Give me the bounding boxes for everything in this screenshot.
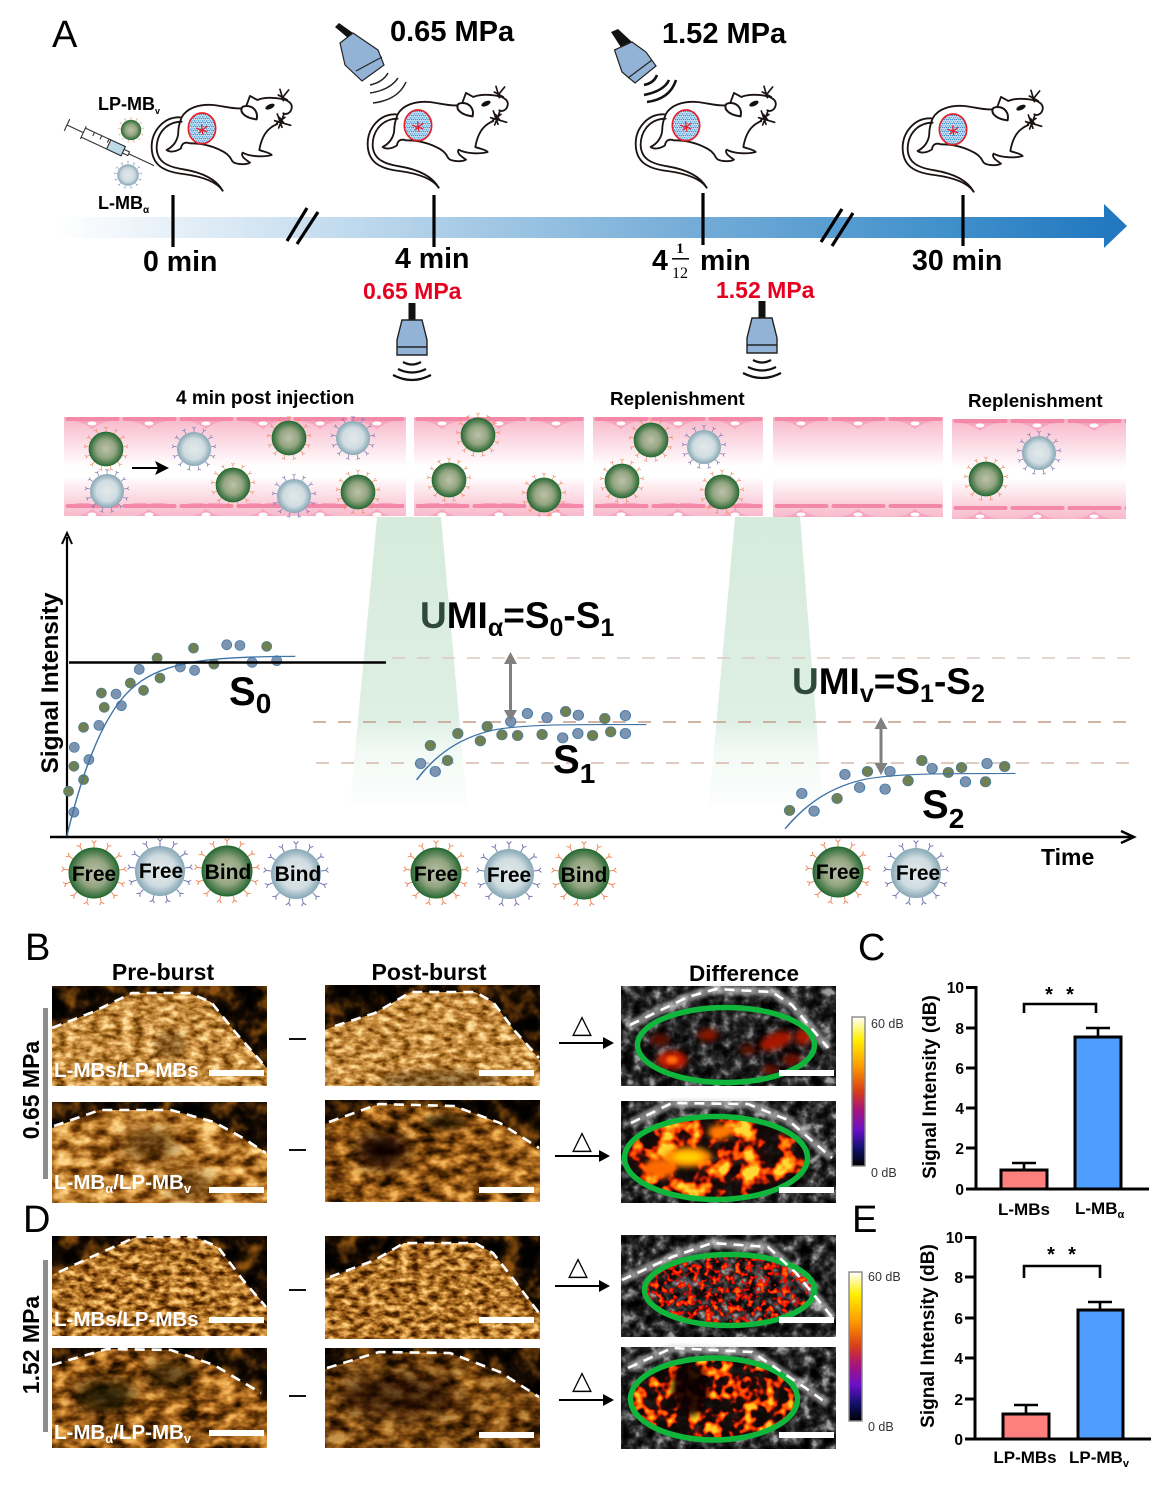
label: LP-MBv: LP-MB [98,94,155,114]
bar: 0.65 MPa group [43,1008,48,1179]
bar chart C: 10 [947,980,964,997]
label: 4 1/12 min: min [700,245,751,277]
label: 1.52 MPa group: 1.52 MPa [18,1296,44,1394]
S1 label: 1 [580,758,595,789]
ultrasound: pre-burst 1.52 MPa L-MBs: L-MBs/LP-MBs [54,1308,199,1331]
equation UMI alpha: =S [503,595,550,636]
bubble: free green 3: Free [816,861,860,884]
ultrasound: post-burst 1.52 MPa L-MBa [325,1348,540,1448]
bubble: bind green 2 [551,842,617,906]
bar chart C: 2 [955,1141,964,1158]
colour bar top: 60 dB [871,1017,904,1031]
bubble: bind green 2: Bind [561,864,607,887]
label: red 0.65 MPa: 0.65 MPa [363,278,462,304]
vessel 2 [414,413,584,517]
label: 0.65 MPa top: 0.65 MPa [390,16,515,48]
icon: L-MBa bubble [114,161,142,189]
S1 label: S [553,738,580,782]
colour bar bottom: 0 dB [868,1420,894,1434]
S2 label: S [922,783,949,827]
ultrasound: post-burst 1.52 MPa L-MBs [325,1236,540,1339]
rat at 4 min [368,86,508,188]
ultrasound: pre-burst 0.65 MPa L-MBa [52,1102,267,1203]
bar chart C: * [1045,984,1053,1006]
equation UMI v: =S [874,661,920,702]
difference image row 2 [621,1101,836,1203]
bubble: free grey 1 [127,838,193,903]
bubble: free grey 1: Free [139,860,183,883]
S2 label: 2 [949,803,964,834]
bubble: free grey 3 [883,840,949,905]
label: LP-MBv: v [155,106,160,116]
minus signs [289,1038,306,1397]
column heading: Difference: Difference [689,961,799,986]
timeline ticks and axis breaks [173,193,963,247]
bubble: free grey 3: Free [896,862,940,885]
equation UMI alpha: 1 [600,614,614,642]
difference image row 4 [621,1347,836,1449]
label: 4 1/12 min: 12 [672,265,688,282]
difference image row 3 [621,1235,836,1337]
delta and arrow row 3: △ [568,1252,588,1282]
bubble: bind green 1: Bind [205,861,251,884]
bar chart C: L-MBs [998,1200,1050,1219]
equation UMI alpha: 0 [550,614,563,642]
vessel 5 [952,419,1126,519]
bubble: free green 2 [403,840,469,905]
ultrasound: pre-burst 0.65 MPa L-MBs: L-MBs/LP-MBs [54,1059,199,1082]
ultrasound: pre-burst 1.52 MPa L-MBa: α [105,1431,113,1446]
icon: tilted probe 0.65 MPa [335,23,406,103]
bar chart C: 8 [955,1021,964,1038]
ultrasound: post-burst 0.65 MPa L-MBa [325,1100,540,1202]
colour bar top [852,1017,904,1180]
bar chart E: LP-MB [1069,1448,1123,1467]
bar chart E: 2 [954,1392,963,1409]
bubble: free green 3 [805,840,871,904]
label: 4 min: 4 min [395,243,469,275]
equation UMI v: v [860,680,874,708]
delta and arrow row 4 [559,1366,614,1406]
bar chart E: 10 [946,1230,963,1247]
y axis title: Signal Intensity [37,592,64,774]
bubble: bind green 1 [194,838,260,903]
icon: syringe [64,119,157,172]
ultrasound: pre-burst 0.65 MPa L-MBa: v [184,1181,192,1196]
column heading: Pre-burst: Pre-burst [112,959,214,985]
ultrasound: pre-burst 0.65 MPa L-MBs [52,986,267,1086]
S0 level line [69,661,386,664]
bubble: free grey 2 [476,842,542,906]
panel D label: D [23,1199,50,1241]
S0 label: 0 [256,688,271,719]
bar chart E: * [1068,1244,1076,1266]
equation UMI v: 2 [971,680,985,708]
label: L-MBa: L-MB [98,193,143,213]
icon: probe 1.52 MPa [743,301,781,378]
label: 30 min: 30 min [912,245,1002,277]
x axis title: Time [1041,844,1094,870]
label: 4 1/12 min [652,241,751,282]
label: 0.65 MPa group: 0.65 MPa [18,1041,44,1139]
S0 scatter and curve [64,640,295,836]
equation UMI alpha: α [488,614,504,642]
bubble: free green 1: Free [72,863,116,886]
chart axes [50,533,1134,843]
label: Replenishment 2: Replenishment [968,390,1103,411]
double arrow UMI v [874,717,888,775]
icon: LP-MBv bubble [118,117,144,143]
bar chart C: 4 [955,1101,964,1118]
rat at 0 min [152,89,292,191]
bar chart E: * [1047,1244,1055,1266]
equation UMI v: UMI [792,661,860,702]
panel B label: B [25,927,50,969]
panel E label: E [852,1199,877,1241]
difference image row 1 [621,986,836,1086]
bar chart C: L-MB [1075,1199,1117,1218]
ultrasound: pre-burst 1.52 MPa L-MBa [52,1348,267,1448]
equation UMI alpha: UMI [420,595,488,636]
bar chart E: 6 [954,1311,963,1328]
S0 label: S [229,670,256,714]
equation UMI alpha: -S [563,595,600,636]
ultrasound: pre-burst 1.52 MPa L-MBa: /LP-MB [113,1421,184,1444]
bubble: free green 1 [61,840,127,905]
label: Replenishment 1: Replenishment [610,388,745,409]
vessel 1 [64,416,406,518]
delta and arrow row 3 [555,1252,610,1292]
bar chart E: 4 [954,1351,963,1368]
bar chart E: Signal Intensity (dB) [918,1244,939,1428]
ultrasound: pre-burst 0.65 MPa L-MBa: α [105,1181,113,1196]
column heading: Post-burst: Post-burst [372,959,487,985]
label: 4 1/12 min: 1 [676,241,684,257]
label: 4 1/12 min: 4 [652,245,668,277]
bubble: bind grey 1 [263,842,329,906]
bar chart C: α [1117,1209,1124,1221]
bar chart C: 0 [955,1182,964,1199]
ultrasound: pre-burst 1.52 MPa L-MBa: L-MB [54,1421,105,1444]
panel C label: C [858,927,885,969]
panel A label: A [52,14,78,56]
bar chart E [918,1230,1151,1470]
bar chart C [920,980,1149,1221]
label: 1.52 MPa top: 1.52 MPa [662,18,787,50]
colour bar bottom [849,1270,901,1434]
reference dashes [313,658,1130,763]
label: red 1.52 MPa: 1.52 MPa [716,277,815,303]
vessel 4 [773,417,943,517]
bubble: bind grey 1: Bind [275,863,321,886]
burst zone 2 [709,517,823,805]
bar chart E: 8 [954,1270,963,1287]
burst zone 1 [350,517,467,805]
ultrasound: post-burst 0.65 MPa L-MBs [325,985,540,1090]
label: 0 min: 0 min [143,246,217,278]
bubble: free green 2: Free [414,863,458,886]
rat at 30 min [903,90,1043,192]
icon: tilted probe 1.52 MPa [611,29,676,102]
colour bar top: 0 dB [871,1166,897,1180]
icon: probe 0.65 MPa [393,303,431,380]
colour bar bottom: 60 dB [868,1270,901,1284]
bar chart E: 0 [954,1432,963,1449]
bubble: free grey 2: Free [487,864,531,887]
delta and arrow row 2: △ [572,1126,592,1156]
timeline arrow [55,204,1127,248]
S1 and S2 scatter and curves [415,706,1015,829]
vessel 3 [593,417,763,516]
rat at 4 1/12 min [636,86,776,188]
equation UMI v: 1 [920,680,934,708]
equation UMI v: -S [934,661,971,702]
delta and arrow row 1: △ [572,1010,592,1040]
bar: 1.52 MPa group [43,1260,48,1432]
bar chart E: v [1123,1458,1130,1470]
delta and arrow row 2 [555,1126,610,1162]
label: L-MBa: α [143,205,150,216]
delta and arrow row 1 [559,1010,614,1049]
ultrasound: pre-burst 0.65 MPa L-MBa: /LP-MB [113,1171,184,1194]
delta and arrow row 4: △ [572,1366,592,1396]
ultrasound: pre-burst 0.65 MPa L-MBa: L-MB [54,1171,105,1194]
ultrasound: pre-burst 1.52 MPa L-MBa: v [184,1431,192,1446]
bar chart E: LP-MBs [993,1448,1057,1467]
double arrow UMI alpha [504,652,517,722]
ultrasound: pre-burst 1.52 MPa L-MBs [52,1236,267,1336]
label: 4 min post injection: 4 min post injection [176,388,354,409]
bar chart C: 6 [955,1061,964,1078]
bar chart C: Signal Intensity (dB) [920,995,941,1179]
bar chart C: * [1066,984,1074,1006]
